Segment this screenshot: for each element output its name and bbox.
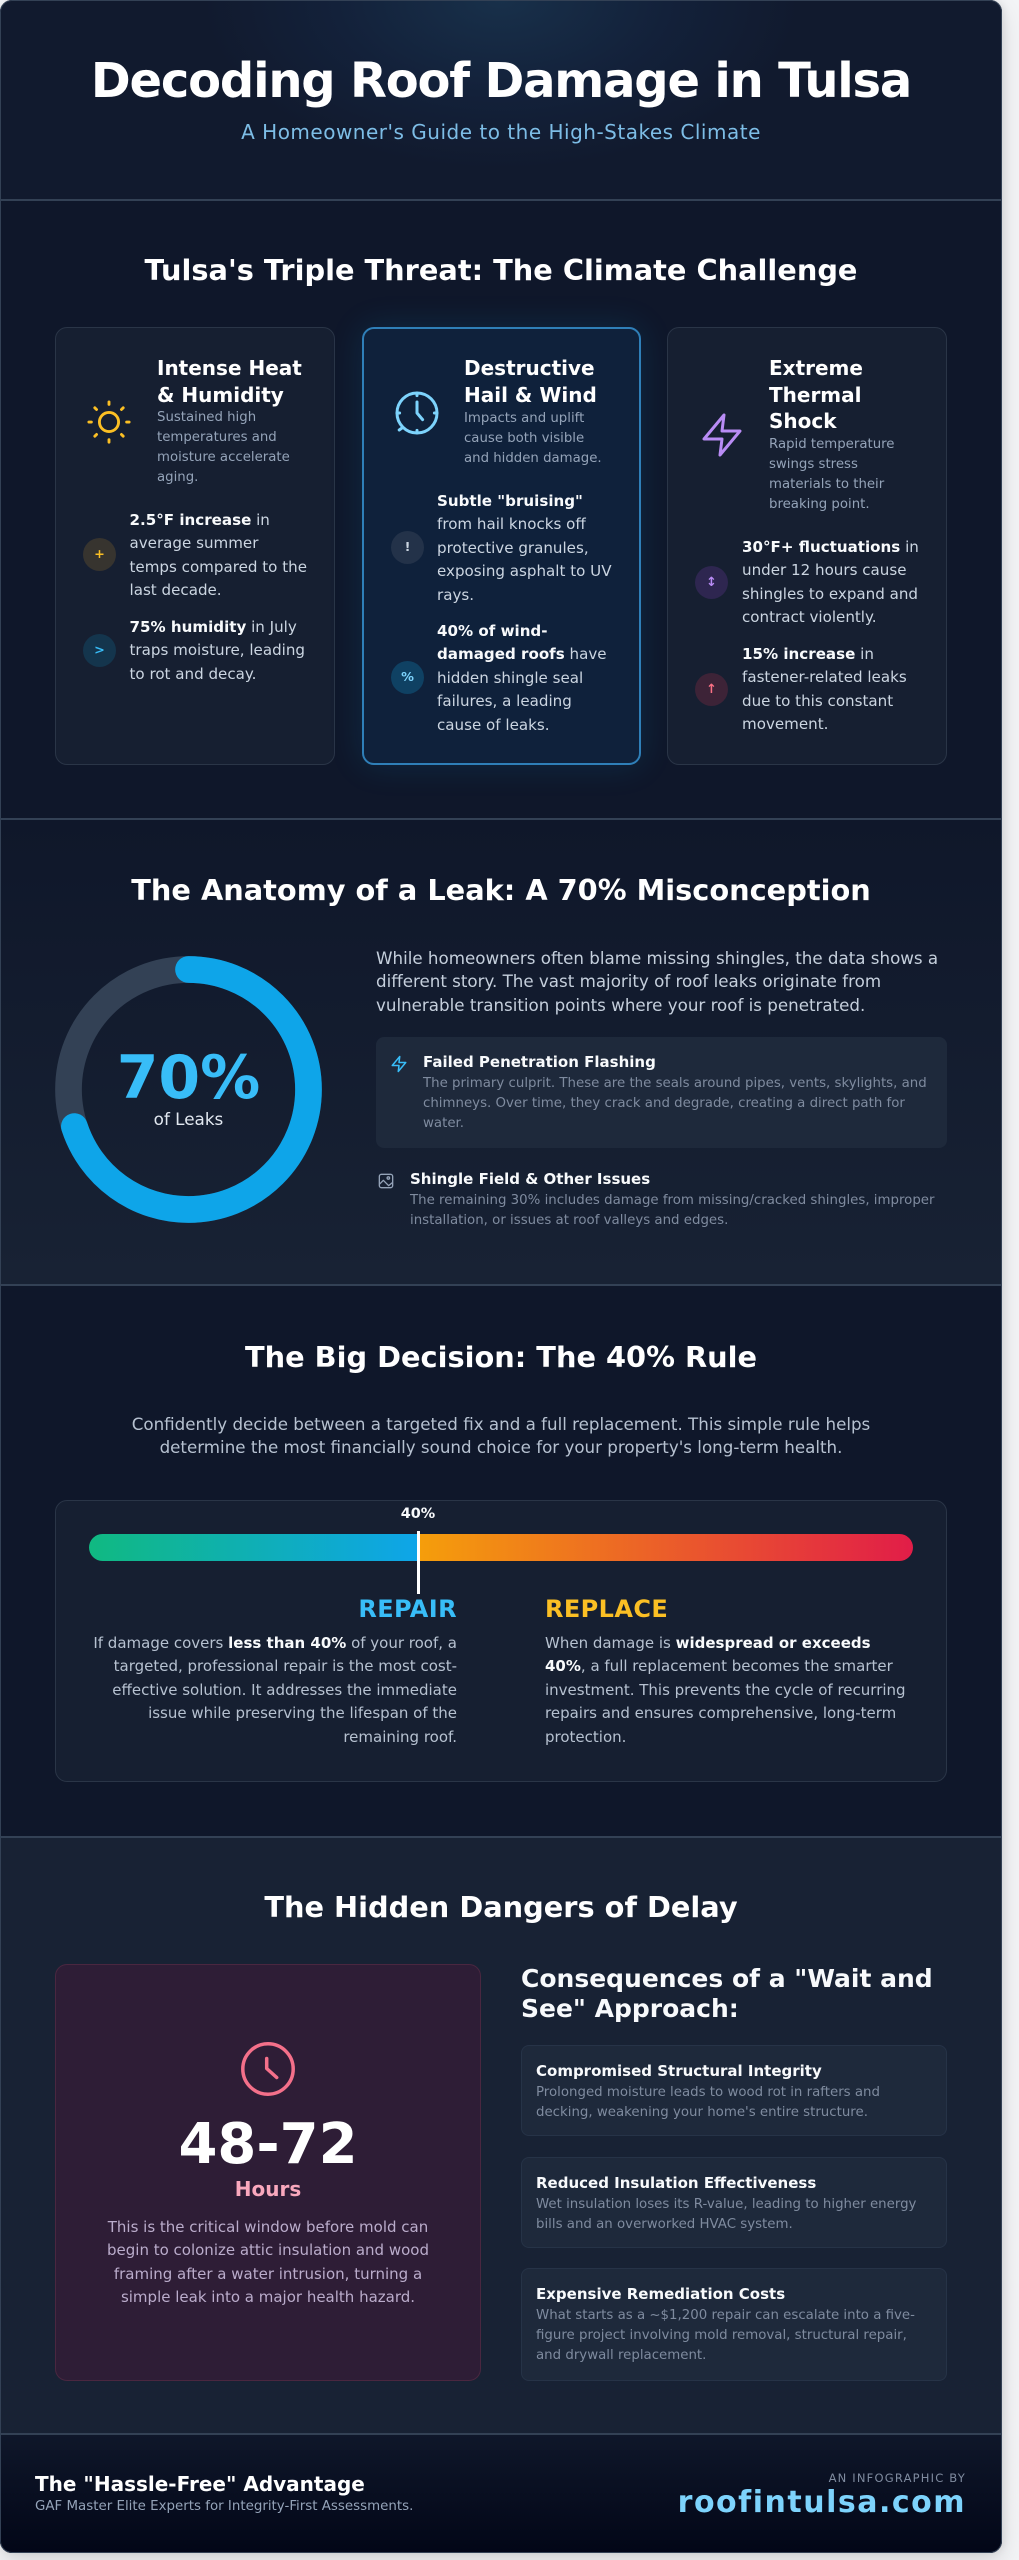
card description: breaking point. — [769, 497, 870, 512]
icon: image — [378, 1174, 394, 1188]
stat: fastener leaks: due to this constant — [742, 692, 893, 710]
stat: seal failures: 40% of wind- — [437, 622, 548, 640]
card description: aging. — [157, 470, 198, 485]
consequence text: decking, weakening your home's entire structure. — [536, 2105, 868, 2120]
card title: Destructive — [464, 356, 595, 380]
panel: critical window — [55, 1964, 481, 2381]
stat: bruising: Subtle "bruising" — [437, 492, 583, 510]
card title — [157, 356, 302, 407]
replace text — [545, 1634, 906, 1746]
stat: fluctuations: shingles to expand and — [742, 585, 918, 603]
repair text — [93, 1634, 457, 1746]
callout text: The primary culprit. These are the seals around pipes, vents, skylights, and — [423, 1076, 927, 1091]
critical window text: begin to colonize attic insulation and wood — [107, 2241, 429, 2259]
consequence text: figure project involving mold removal, structural repair, — [536, 2328, 907, 2343]
bullet icon: up arrow — [695, 673, 728, 706]
stat: humidity: to rot and decay. — [130, 665, 256, 683]
consequence: remediation costs — [521, 2268, 947, 2381]
stat: humidity: traps moisture, leading — [130, 641, 305, 659]
note text: The remaining 30% includes damage from missing/cracked shingles, improper — [410, 1193, 934, 1208]
card: heat and humidity — [55, 327, 335, 765]
stat: fastener leaks: fastener-related leaks — [742, 668, 907, 686]
stat: seal failures: hidden shingle seal — [437, 669, 583, 687]
replace text: protection. — [545, 1728, 626, 1746]
card description: cause both visible — [464, 431, 584, 446]
card title — [769, 356, 863, 433]
bullet icon: plus — [83, 538, 116, 571]
card title: Thermal — [769, 383, 862, 407]
consequence: structural integrity — [521, 2045, 947, 2136]
heading: triple threat: Tulsa's Triple Threat: The Climate Challenge — [145, 253, 857, 287]
icon: clock — [396, 392, 438, 434]
card title: Intense Heat — [157, 356, 302, 380]
card description: Sustained high — [157, 410, 256, 425]
heading: hidden dangers: The Hidden Dangers of Delay — [264, 1890, 738, 1924]
heading: anatomy: The Anatomy of a Leak: A 70% Misconception — [131, 873, 871, 907]
card title: & Humidity — [157, 383, 284, 407]
card description — [157, 410, 290, 485]
icon: lightning bolt — [702, 414, 742, 456]
consequence title: Reduced Insulation Effectiveness — [536, 2174, 816, 2192]
stat: fastener leaks: 15% increase in — [742, 645, 874, 663]
panel: decision scale — [55, 1500, 947, 1782]
card: thermal shock — [667, 327, 947, 765]
heading: consequences: Consequences of a "Wait and — [521, 1964, 933, 1993]
bullet icon: exclamation — [391, 531, 424, 564]
stat: seal failures — [437, 622, 607, 734]
repair text: issue while preserving the lifespan of the — [148, 1704, 457, 1722]
note text — [410, 1193, 934, 1228]
repair text: effective solution. It addresses the immediate — [112, 1681, 457, 1699]
stat: humidity — [130, 618, 305, 683]
bullet icon: percent — [391, 661, 424, 694]
consequence text: Prolonged moisture leads to wood rot in rafters and — [536, 2085, 880, 2100]
header band — [0, 0, 1002, 200]
stat: fastener leaks: movement. — [742, 715, 828, 733]
card description: Rapid temperature — [769, 437, 894, 452]
gradient bar — [89, 1534, 913, 1561]
repair text: If damage covers less than 40% of your roof, a — [93, 1634, 457, 1652]
consequence title: Compromised Structural Integrity — [536, 2062, 822, 2080]
callout title: Failed Penetration Flashing — [423, 1053, 656, 1071]
card description: materials to their — [769, 477, 884, 492]
stat: bruising: protective granules, — [437, 539, 589, 557]
critical window text: framing after a water intrusion, turning a — [114, 2265, 422, 2283]
consequence text: and drywall replacement. — [536, 2348, 706, 2363]
card: hail and wind — [362, 327, 641, 765]
stat: temperature increase: 2.5°F increase in — [130, 511, 270, 529]
consequence text: Wet insulation loses its R-value, leading to higher energy — [536, 2197, 916, 2212]
critical window text: simple leak into a major health hazard. — [121, 2288, 415, 2306]
stat: seal failures: failures, a leading — [437, 692, 572, 710]
card description: and hidden damage. — [464, 451, 602, 466]
card description: swings stress — [769, 457, 858, 472]
section: hidden dangers — [0, 1837, 1002, 2434]
intro text: Confidently decide between a targeted fix and a full replacement. This simple rule helps — [132, 1414, 870, 1434]
icon: bolt — [392, 1056, 406, 1072]
stat: bruising: from hail knocks off — [437, 515, 586, 533]
replace label: REPLACE — [545, 1595, 668, 1623]
stat: temperature increase: average summer — [130, 534, 258, 552]
bullet icon: chevron — [83, 634, 116, 667]
bullet icon: plus: + — [94, 547, 105, 562]
intro paragraph: While homeowners often blame missing shingles, the data shows a — [376, 948, 938, 968]
stat: bruising: rays. — [437, 586, 474, 604]
footer — [0, 2434, 1002, 2554]
intro paragraph: vulnerable transition points where your roof is penetrated. — [376, 995, 865, 1015]
stat: temperature increase: last decade. — [130, 581, 222, 599]
repair label: REPAIR — [358, 1595, 457, 1623]
repair text: remaining roof. — [343, 1728, 457, 1746]
icon: sun — [87, 400, 131, 444]
callout text: water. — [423, 1116, 464, 1131]
stat: temperature increase — [130, 511, 307, 599]
card title: Extreme — [769, 356, 863, 380]
repair text: targeted, professional repair is the most cost- — [114, 1657, 457, 1675]
replace text: investment. This prevents the cycle of recurring — [545, 1681, 906, 1699]
bullet icon: exclamation: ! — [405, 540, 410, 555]
card description — [769, 437, 894, 512]
title: Decoding Roof Damage in Tulsa — [91, 53, 911, 109]
stat: fastener leaks — [742, 645, 907, 733]
note title: Shingle Field & Other Issues — [410, 1170, 650, 1188]
threshold label: 40% — [401, 1506, 435, 1522]
stat: fluctuations: contract violently. — [742, 608, 877, 626]
consequence: insulation — [521, 2157, 947, 2248]
card title: Shock — [769, 409, 837, 433]
note: shingle field and other issues — [378, 1170, 934, 1228]
card title — [464, 356, 597, 407]
intro paragraph — [376, 948, 938, 1015]
stat: humidity: 75% humidity in July — [130, 618, 297, 636]
critical window text — [107, 2218, 429, 2306]
byline: AN INFOGRAPHIC BY — [829, 2471, 966, 2485]
footer tagline: GAF Master Elite Experts for Integrity-First Assessments. — [35, 2499, 413, 2514]
consequence text: What starts as a ~$1,200 repair can escalate into a five- — [536, 2308, 915, 2323]
donut chart: 70 percent — [55, 956, 322, 1223]
replace text: 40%, a full replacement becomes the smarter — [545, 1657, 893, 1675]
callout text — [423, 1076, 927, 1131]
hours label: Hours — [235, 2177, 301, 2201]
stat: seal failures: damaged roofs have — [437, 645, 607, 663]
consequence text — [536, 2085, 880, 2120]
replace text: When damage is widespread or exceeds — [545, 1634, 871, 1652]
note text: installation, or issues at roof valleys and edges. — [410, 1213, 728, 1228]
bullet icon: percent: % — [401, 670, 414, 685]
consequence text — [536, 2308, 915, 2363]
stat: fluctuations — [742, 538, 919, 626]
bullet icon: up arrow: ↑ — [706, 682, 717, 697]
donut caption: of Leaks — [154, 1109, 223, 1129]
icon: clock — [241, 2042, 295, 2096]
big number: 48-72 — [178, 2112, 358, 2177]
callout: failed penetration flashing — [376, 1037, 947, 1148]
stat: bruising — [437, 492, 612, 604]
bullet icon: up-down arrow — [695, 566, 728, 599]
section: triple threat — [0, 199, 1002, 819]
card description: moisture accelerate — [157, 450, 290, 465]
card description: Impacts and uplift — [464, 411, 584, 426]
intro paragraph: different story. The vast majority of roof leaks originate from — [376, 971, 881, 991]
callout text: chimneys. Over time, they crack and degrade, creating a direct path for — [423, 1096, 905, 1111]
intro text: determine the most financially sound choice for your property's long-term health. — [160, 1437, 842, 1457]
card description: temperatures and — [157, 430, 277, 445]
threshold marker — [417, 1531, 420, 1594]
heading: consequences — [521, 1964, 933, 2023]
intro text — [132, 1414, 870, 1457]
consequence text — [536, 2197, 916, 2232]
consequence text: bills and an overworked HVAC system. — [536, 2217, 793, 2232]
website: roofintulsa.com — [678, 2485, 966, 2520]
stat: fluctuations: under 12 hours cause — [742, 561, 907, 579]
stat: seal failures: cause of leaks. — [437, 716, 550, 734]
stat: temperature increase: temps compared to the — [130, 558, 307, 576]
subtitle: A Homeowner's Guide to the High-Stakes Climate — [241, 120, 761, 144]
footer title: The "Hassle-Free" Advantage — [35, 2472, 365, 2496]
card description — [464, 411, 602, 466]
bullet icon: chevron: > — [94, 643, 105, 658]
consequence title: Expensive Remediation Costs — [536, 2285, 785, 2303]
section: the 40 percent rule — [0, 1285, 1002, 1837]
heading: consequences: See" Approach: — [521, 1994, 739, 2023]
card title: Hail & Wind — [464, 383, 597, 407]
replace text: repairs and ensures comprehensive, long-term — [545, 1704, 896, 1722]
bullet icon: up-down arrow: ↕ — [706, 575, 717, 590]
stat: bruising: exposing asphalt to UV — [437, 562, 612, 580]
heading: big decision: The Big Decision: The 40% Rule — [245, 1340, 757, 1374]
critical window text: This is the critical window before mold can — [108, 2218, 428, 2236]
stat: fluctuations: 30°F+ fluctuations in — [742, 538, 919, 556]
donut value: 70% — [117, 1043, 260, 1113]
section: anatomy of a leak — [0, 819, 1002, 1285]
